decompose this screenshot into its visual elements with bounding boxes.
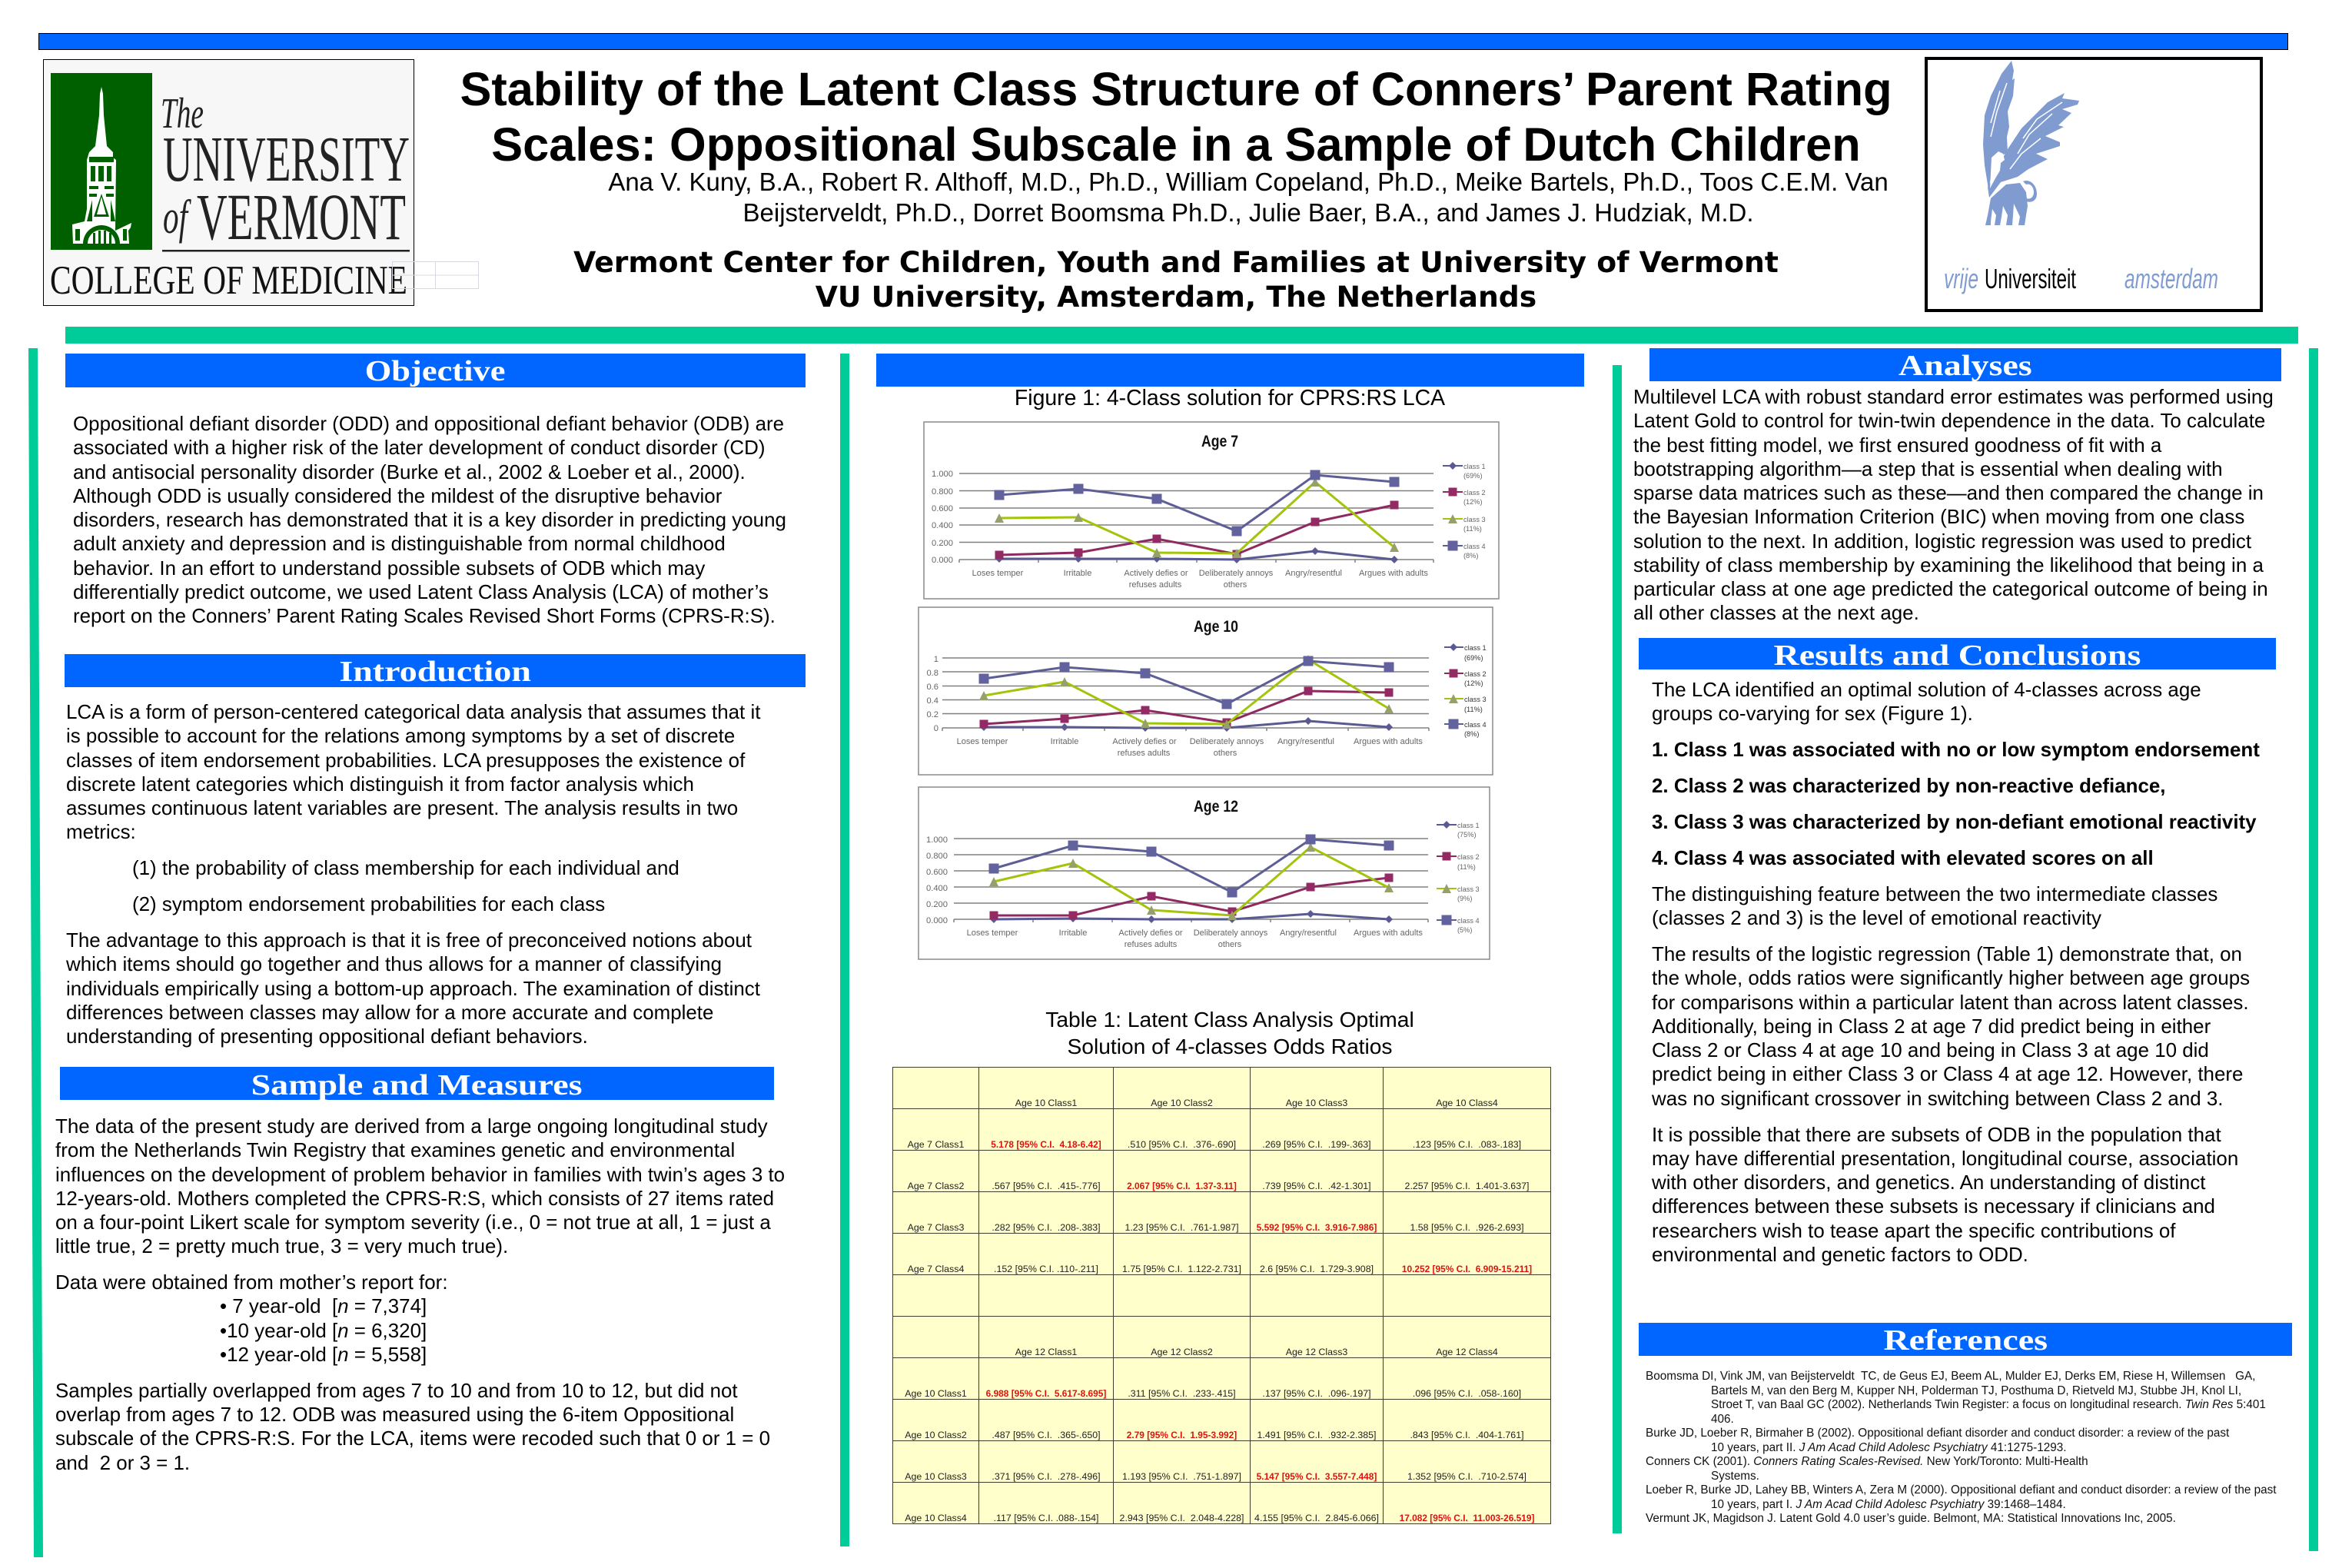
text: analyses: Latent Gold to control for twin-twin dependence in the data. To calculate xyxy=(1633,410,2265,432)
table: odds ratios: 5.147 [95% C.I. 3.557-7.448] xyxy=(1257,1471,1377,1482)
table: odds ratios: Age 7 Class4 xyxy=(908,1264,964,1274)
affiliations: Vermont Center for Children, Youth and Families at University of Vermont xyxy=(573,245,1779,279)
text: introduction: individuals empirically using a bottom-up approach. The examination of distinct xyxy=(66,978,760,1000)
text: sample and measures: •12 year-old [n = 5,558] xyxy=(220,1344,427,1366)
chart: Age 10: Age 10 xyxy=(1194,618,1238,636)
chart: Age 7: Angry/resentful xyxy=(1285,569,1342,578)
text: analyses: sparse data matrices such as these—and then compared the change in xyxy=(1633,483,2264,504)
table: odds ratios: 1.23 [95% C.I. .761-1.987] xyxy=(1125,1222,1239,1233)
table: odds ratios: 4.155 [95% C.I. 2.845-6.066] xyxy=(1254,1513,1379,1523)
chart: Age 12: class 1 xyxy=(1457,822,1480,829)
chart: Age 10: refuses adults xyxy=(1118,749,1171,758)
text: results and conclusions: 3. Class 3 was characterized by non-defiant emotional reactivity xyxy=(1652,812,2257,833)
chart: Age 7: Actively defies or xyxy=(1124,569,1188,578)
table: odds ratios: Age 10 Class3 xyxy=(1286,1098,1347,1108)
chart: Age 12: Irritable xyxy=(1059,929,1087,938)
table: odds ratios: .487 [95% C.I. .365-.650] xyxy=(992,1430,1101,1440)
chart: Age 12: class 4 xyxy=(1457,917,1480,925)
table: odds ratios: 1.75 [95% C.I. 1.122-2.731] xyxy=(1122,1264,1241,1274)
chart: Age 7: class 4 xyxy=(1463,543,1486,550)
chart: Age 12: Argues with adults xyxy=(1354,929,1423,938)
text: analyses: solution to the next. In addition, logistic regression was used to predict xyxy=(1633,530,2251,552)
table: odds ratios: Age 10 Class4 xyxy=(905,1513,967,1523)
chart: Age 10: Deliberately annoys xyxy=(1190,737,1264,746)
title xyxy=(460,63,1892,171)
text: introduction: is possible to account for the relations among symptoms by a set of discrete xyxy=(66,726,735,747)
chart: Age 12: Actively defies or xyxy=(1118,929,1183,938)
text: sample and measures: overlap from ages 7 to 12. ODB was measured using the 6-item Oppositional xyxy=(55,1404,734,1426)
text: objective: Oppositional defiant disorder (ODD) and oppositional defiant behavior (ODB) are xyxy=(73,414,784,435)
text: introduction: metrics: xyxy=(66,822,136,843)
text: introduction: (2) symptom endorsement probabilities for each class xyxy=(132,894,605,915)
heading: Objective: Objective xyxy=(365,355,506,387)
heading: Analyses xyxy=(1649,348,2281,381)
chart: Age 10: 0.8 xyxy=(926,669,938,678)
table: odds ratios: Age 7 Class3 xyxy=(908,1222,964,1233)
text: results and conclusions: may have differential presentation, longitudinal course, association xyxy=(1652,1148,2238,1170)
table: odds ratios: 1.352 [95% C.I. .710-2.574] xyxy=(1407,1471,1526,1482)
blank heading bar: middle column xyxy=(876,354,1584,387)
table: odds ratios: .117 [95% C.I. .088-.154] xyxy=(994,1513,1098,1523)
text: results and conclusions: with other disorders, and genetics. An understanding of distinct xyxy=(1652,1172,2205,1194)
authors: Beijsterveldt, Ph.D., Dorret Boomsma Ph.D., Julie Baer, B.A., and James J. Hudziak, M.D. xyxy=(742,198,1754,227)
text: results and conclusions: differences between these subsets is necessary if clinicians and xyxy=(1652,1196,2215,1218)
text: sample and measures: Samples partially overlapped from ages 7 to 10 and from 10 to 12, but did not xyxy=(55,1380,738,1402)
text: sample and measures xyxy=(55,1116,785,1474)
chart: Age 7: 0.400 xyxy=(932,521,953,530)
chart: Age 12: (75%) xyxy=(1457,831,1477,839)
chart: Age 10: Loses temper xyxy=(957,737,1008,746)
chart: Age 10: Angry/resentful xyxy=(1277,737,1334,746)
table: odds ratios: .152 [95% C.I. .110-.211] xyxy=(994,1264,1098,1274)
table title xyxy=(1045,1007,1414,1058)
chart: Age 10: 0.4 xyxy=(926,696,938,706)
chart: Age 7: class 2 xyxy=(1463,489,1486,497)
chart: Age 10: (12%) xyxy=(1464,679,1483,687)
text: sample and measures: subscale of the CPRS-R:S. For the LCA, items were recoded such that 0 or 1 = 0 xyxy=(55,1428,770,1450)
chart: Age 10: Argues with adults xyxy=(1354,737,1423,746)
text: introduction: LCA is a form of person-centered categorical data analysis that assumes that it xyxy=(66,702,760,723)
logo: Vrije Universiteit Amsterdam: vrije xyxy=(1944,263,1978,294)
table: odds ratios: 2.6 [95% C.I. 1.729-3.908] xyxy=(1260,1264,1374,1274)
chart: Age 12: 0.400 xyxy=(926,884,948,893)
chart: Age 7: (69%) xyxy=(1463,472,1483,480)
text: introduction: classes of item endorsement probabilities. LCA presupposes the existence of xyxy=(66,750,745,772)
table: odds ratios: Age 12 Class4 xyxy=(1436,1347,1498,1357)
text: objective: Although ODD is usually considered the mildest of the disruptive behavior xyxy=(73,486,722,507)
text: sample and measures: Data were obtained from mother’s report for: xyxy=(55,1272,448,1294)
table: odds ratios: .123 [95% C.I. .083-.183] xyxy=(1413,1139,1521,1150)
text: references: Burke JD, Loeber R, Birmaher B (2002). Oppositional defiant disorder and conduct disorder: a review of the past xyxy=(1646,1427,2229,1440)
table: odds ratios: 2.79 [95% C.I. 1.95-3.992] xyxy=(1127,1430,1237,1440)
text: analyses: bootstrapping algorithm—a step that is essential when dealing with xyxy=(1633,459,2223,480)
table: odds ratios: 6.988 [95% C.I. 5.617-8.695] xyxy=(986,1388,1106,1399)
text: results and conclusions: was no significant crossover in switching between Class 2 and 3. xyxy=(1652,1088,2223,1110)
chart: Age 12: class 2 xyxy=(1457,853,1480,861)
table: odds ratios: 17.082 [95% C.I. 11.003-26.519] xyxy=(1400,1513,1534,1523)
text: references xyxy=(1646,1370,2277,1525)
green divider bar xyxy=(65,327,2298,344)
text: introduction: assumes continuous latent variables are present. The analysis results in two xyxy=(66,798,738,819)
text: analyses: the Bayesian Information Criterion (BIC) when moving from one class xyxy=(1633,507,2244,528)
text: results and conclusions: 1. Class 1 was associated with no or low symptom endorsement xyxy=(1652,739,2260,761)
table: odds ratios: Age 12 Class2 xyxy=(1151,1347,1213,1357)
chart: Age 10: 0.2 xyxy=(926,710,938,719)
chart: Age 12: 0.200 xyxy=(926,900,948,909)
chart: Age 7: (12%) xyxy=(1463,498,1483,506)
text: results and conclusions: environmental and genetic factors to ODD. xyxy=(1652,1244,2028,1266)
chart: Age 12: Angry/resentful xyxy=(1280,929,1337,938)
chart: Age 7: Deliberately annoys xyxy=(1199,569,1274,578)
text: introduction: discrete latent categories which distinguish it from factor analysis which xyxy=(66,774,694,796)
chart: Age 10 xyxy=(919,607,1493,775)
logo: University of Vermont College of Medicine: The xyxy=(161,90,204,138)
chart: Age 10: class 2 xyxy=(1464,670,1487,678)
chart: Age 10: class 3 xyxy=(1464,696,1487,703)
text: sample and measures: influences on the development of problem behavior in families with twin’s ages 3 to xyxy=(55,1164,785,1185)
text: results and conclusions: The LCA identified an optimal solution of 4-classes across age xyxy=(1652,679,2201,701)
chart: Age 7: (11%) xyxy=(1463,525,1482,533)
text: references: Bartels M, van den Berg M, Kupper NH, Polderman TJ, Posthuma D, Rietveld MJ, Stubbe JH, Knol LI, xyxy=(1711,1384,2241,1397)
text: objective: behavior. In an effort to understand possible subsets of ODB which may xyxy=(73,558,705,580)
chart: Age 7: 0.000 xyxy=(932,556,953,565)
text: introduction: differences between classes may allow for a more accurate and complete xyxy=(66,1002,713,1024)
chart: Age 12: class 3 xyxy=(1457,885,1480,893)
chart: Age 12: refuses adults xyxy=(1125,940,1178,949)
heading: Results and Conclusions xyxy=(1639,638,2276,669)
text: references: 10 years, part II. J Am Acad Child Adolesc Psychiatry 41:1275-1293. xyxy=(1711,1441,2067,1454)
text: results and conclusions: The results of the logistic regression (Table 1) demonstrate that, on xyxy=(1652,944,2242,965)
chart: Age 7: class 1 xyxy=(1463,463,1486,470)
text: analyses: Multilevel LCA with robust standard error estimates was performed using xyxy=(1633,387,2274,408)
text: references: Conners CK (2001). Conners Rating Scales-Revised. New York/Toronto: Multi-Health xyxy=(1646,1455,2088,1468)
table: odds ratios: 10.252 [95% C.I. 6.909-15.211] xyxy=(1402,1264,1532,1274)
text: introduction: The advantage to this approach is that it is free of preconceived notions about xyxy=(66,930,752,952)
chart: Age 7: Irritable xyxy=(1064,569,1091,578)
text: sample and measures: •10 year-old [n = 6,320] xyxy=(220,1321,427,1342)
table title: Solution of 4-classes Odds Ratios xyxy=(1067,1034,1393,1058)
text: references: Systems. xyxy=(1711,1470,1759,1483)
heading: Introduction xyxy=(65,654,806,687)
logo: Vrije Universiteit Amsterdam: Universiteit xyxy=(1985,263,2076,294)
logo: University of Vermont College of Medicine xyxy=(43,59,479,306)
text: objective: differentially predict outcome, we used Latent Class Analysis (LCA) of mother’s xyxy=(73,582,769,603)
table: odds ratios: .096 [95% C.I. .058-.160] xyxy=(1413,1388,1521,1399)
affiliations xyxy=(573,245,1779,314)
text: results and conclusions xyxy=(1652,679,2260,1266)
table: odds ratios: Age 10 Class3 xyxy=(905,1471,967,1482)
authors: Ana V. Kuny, B.A., Robert R. Althoff, M.D., Ph.D., William Copeland, Ph.D., Meike Bartels, Ph.D., Toos C.E.M. Van xyxy=(608,168,1889,196)
chart: Age 10: (8%) xyxy=(1464,730,1479,738)
table: odds ratios: 5.178 [95% C.I. 4.18-6.42] xyxy=(991,1139,1101,1150)
chart: Age 7: Argues with adults xyxy=(1359,569,1428,578)
heading: Introduction: Introduction xyxy=(339,656,531,687)
affiliations: VU University, Amsterdam, The Netherlands xyxy=(816,280,1536,314)
text: sample and measures: The data of the present study are derived from a large ongoing longitudinal study xyxy=(55,1116,768,1138)
logo: Vrije Universiteit Amsterdam xyxy=(1925,57,2263,312)
chart: Age 7: others xyxy=(1224,580,1247,590)
text: references: Stroet T, van Baal GC (2002). Netherlands Twin Register: a focus on longitudinal research. Twin Res 5:401 xyxy=(1711,1398,2266,1411)
chart: Age 7: 1.000 xyxy=(932,470,953,479)
text: results and conclusions: for comparisons within a particular latent than across latent classes. xyxy=(1652,992,2249,1014)
table: odds ratios: 1.58 [95% C.I. .926-2.693] xyxy=(1410,1222,1524,1233)
table: odds ratios: Age 10 Class1 xyxy=(905,1388,967,1399)
text: results and conclusions: the whole, odds ratios were significantly higher between age groups xyxy=(1652,968,2250,989)
heading: References: References xyxy=(1883,1324,2048,1356)
chart: Age 10: Actively defies or xyxy=(1112,737,1177,746)
chart: Age 7: Loses temper xyxy=(972,569,1024,578)
text: results and conclusions: (classes 2 and 3) is the level of emotional reactivity xyxy=(1652,908,2101,929)
text: objective xyxy=(73,414,786,627)
table: odds ratios: .282 [95% C.I. .208-.383] xyxy=(992,1222,1101,1233)
chart: Age 7: 0.200 xyxy=(932,539,953,548)
text: analyses xyxy=(1633,387,2274,624)
text: results and conclusions: It is possible that there are subsets of ODB in the population that xyxy=(1652,1125,2221,1146)
text: results and conclusions: Additionally, being in Class 2 at age 7 did predict being in either xyxy=(1652,1016,2211,1038)
table: odds ratios: .843 [95% C.I. .404-1.761] xyxy=(1410,1430,1524,1440)
chart: Age 12: Deliberately annoys xyxy=(1194,929,1268,938)
chart: Age 12: 0.000 xyxy=(926,916,948,925)
table: odds ratios: .137 [95% C.I. .096-.197] xyxy=(1262,1388,1371,1399)
table: odds ratios: Age 10 Class1 xyxy=(1015,1098,1077,1108)
title: Stability of the Latent Class Structure of Conners’ Parent Rating xyxy=(460,63,1892,115)
chart: Age 12 xyxy=(919,787,1490,959)
chart: Age 12: others xyxy=(1218,940,1242,949)
text: sample and measures: 12-years-old. Mothers completed the CPRS-R:S, which consists of 27 items rated xyxy=(55,1188,774,1210)
table: odds ratios: 5.592 [95% C.I. 3.916-7.986] xyxy=(1257,1222,1377,1233)
chart: Age 7: 0.800 xyxy=(932,487,953,497)
chart: Age 12: Loses temper xyxy=(967,929,1018,938)
chart: Age 7 xyxy=(924,422,1499,599)
far right strip xyxy=(2309,348,2318,1551)
table: odds ratios xyxy=(892,1067,1551,1524)
table: odds ratios: 2.257 [95% C.I. 1.401-3.637] xyxy=(1405,1181,1529,1191)
chart: Age 7: refuses adults xyxy=(1129,580,1182,590)
chart: Age 10: others xyxy=(1214,749,1237,758)
table: odds ratios: .567 [95% C.I. .415-.776] xyxy=(992,1181,1101,1191)
chart: Age 12: 0.800 xyxy=(926,852,948,861)
table: odds ratios: Age 10 Class2 xyxy=(1151,1098,1213,1108)
chart: Age 7: (8%) xyxy=(1463,552,1478,560)
text: sample and measures: from the Netherlands Twin Registry that examines genetic and environmental xyxy=(55,1140,735,1161)
table: odds ratios: Age 10 Class4 xyxy=(1436,1098,1498,1108)
text: results and conclusions: groups co-varying for sex (Figure 1). xyxy=(1652,703,1973,725)
table: odds ratios: 2.067 [95% C.I. 1.37-3.11] xyxy=(1127,1181,1237,1191)
heading: Objective xyxy=(65,354,806,387)
chart: Age 12: (11%) xyxy=(1457,863,1476,871)
text: sample and measures: • 7 year-old [n = 7,374] xyxy=(220,1296,427,1317)
logo: University of Vermont College of Medicine: of xyxy=(163,191,191,244)
text: references: Boomsma DI, Vink JM, van Beijsterveldt TC, de Geus EJ, Beem AL, Mulder EJ, Derks EM, Riese H, Willemsen GA, xyxy=(1646,1370,2255,1383)
text: objective: and antisocial personality disorder (Burke et al., 2002 & Loeber et al., 2000). xyxy=(73,461,746,483)
figure title: Figure 1: 4-Class solution for CPRS:RS LCA xyxy=(1015,386,1445,410)
text: results and conclusions: The distinguishing feature between the two intermediate classes xyxy=(1652,884,2217,905)
right column strip xyxy=(1613,365,1622,1533)
table: odds ratios: .371 [95% C.I. .278-.496] xyxy=(992,1471,1101,1482)
authors xyxy=(608,168,1889,227)
chart: Age 12: (5%) xyxy=(1457,926,1472,934)
table: odds ratios: Age 7 Class2 xyxy=(908,1181,964,1191)
chart: Age 12: 0.600 xyxy=(926,868,948,877)
text: objective: adult anxiety and depression and is distinguishable from normal childhood xyxy=(73,533,726,555)
chart: Age 7: 0.600 xyxy=(932,504,953,513)
table: odds ratios: .311 [95% C.I. .233-.415] xyxy=(1128,1388,1236,1399)
table: odds ratios: .510 [95% C.I. .376-.690] xyxy=(1128,1139,1236,1150)
text: results and conclusions: 4. Class 4 was associated with elevated scores on all xyxy=(1652,848,2154,869)
text: analyses: the best fitting model, we first ensured goodness of fit with a xyxy=(1633,435,2161,457)
text: analyses: stability of class membership by examining the likelihood that being in a xyxy=(1633,555,2264,576)
heading: Analyses: Analyses xyxy=(1899,350,2032,381)
heading: Sample and Measures xyxy=(60,1067,774,1100)
text: results and conclusions: Class 2 or Class 4 at age 10 and being in Class 3 at age 10 did xyxy=(1652,1040,2209,1061)
text: results and conclusions: predict being in either Class 3 or Class 4 at age 12. However, there xyxy=(1652,1064,2243,1085)
table: odds ratios: .269 [95% C.I. .199-.363] xyxy=(1262,1139,1371,1150)
chart: Age 10: Irritable xyxy=(1051,737,1078,746)
chart: Age 7: class 3 xyxy=(1463,516,1486,523)
chart: Age 10: 0 xyxy=(934,724,938,733)
text: references: 10 years, part I. J Am Acad Child Adolesc Psychiatry 39:1468–1484. xyxy=(1711,1498,2066,1511)
text: sample and measures: and 2 or 3 = 1. xyxy=(55,1453,190,1474)
chart: Age 12: (9%) xyxy=(1457,895,1472,902)
chart: Age 10: class 4 xyxy=(1464,721,1487,729)
table: odds ratios: Age 12 Class3 xyxy=(1286,1347,1347,1357)
text: references: 406. xyxy=(1711,1413,1734,1426)
text: sample and measures: little true, 2 = pretty much true, 3 = very much true). xyxy=(55,1236,508,1257)
text: objective: report on the Conners’ Parent Rating Scales Revised Short Forms (CPRS-R:S). xyxy=(73,606,776,627)
table: odds ratios: 1.491 [95% C.I. .932-2.385] xyxy=(1257,1430,1376,1440)
chart: Age 10: 1 xyxy=(934,655,938,664)
logo: Vrije Universiteit Amsterdam: amsterdam xyxy=(2124,263,2218,294)
chart: Age 10: (11%) xyxy=(1464,706,1483,713)
text: results and conclusions: researchers wish to tease apart the specific contributions of xyxy=(1652,1221,2176,1242)
text: sample and measures: on a four-point Likert scale for symptom severity (i.e., 0 = not true at all, 1 = just a xyxy=(55,1212,771,1234)
text: introduction: which items should go together and thus allows for a manner of classifying xyxy=(66,954,722,975)
line charts: figure 1 xyxy=(918,421,1500,960)
text: analyses: particular class at one age predicted the categorical outcome of being in xyxy=(1633,579,2268,600)
table: odds ratios: .739 [95% C.I. .42-1.301] xyxy=(1262,1181,1371,1191)
table: odds ratios: Age 7 Class1 xyxy=(908,1139,964,1150)
text: introduction: (1) the probability of class membership for each individual and xyxy=(132,858,679,879)
text: analyses: all other classes at the next age. xyxy=(1633,603,1919,624)
text: references: Loeber R, Burke JD, Lahey BB, Winters A, Zera M (2000). Oppositional defiant and conduct disorder: a review of the past xyxy=(1646,1483,2277,1497)
table title: Table 1: Latent Class Analysis Optimal xyxy=(1045,1007,1414,1031)
text: objective: disorders, research has demonstrated that it is a key disorder in predicting young xyxy=(73,510,786,531)
chart: Age 12: 1.000 xyxy=(926,835,948,845)
chart: Age 10: (69%) xyxy=(1464,654,1483,662)
top blue bar xyxy=(38,33,2288,50)
text: results and conclusions: 2. Class 2 was characterized by non-reactive defiance, xyxy=(1652,776,2166,797)
text: introduction: understanding of presenting oppositional defiant behaviors. xyxy=(66,1026,588,1048)
chart: Age 12: Age 12 xyxy=(1194,798,1238,816)
title: Scales: Oppositional Subscale in a Sample of Dutch Children xyxy=(491,118,1861,171)
text: introduction xyxy=(66,702,761,1048)
left column strip xyxy=(28,348,43,1557)
table: odds ratios: Age 10 Class2 xyxy=(905,1430,967,1440)
text: references: Vermunt JK, Magidson J. Latent Gold 4.0 user’s guide. Belmont, MA: Statistical Innovations Inc, 2005. xyxy=(1646,1512,2176,1525)
table: odds ratios: Age 12 Class1 xyxy=(1015,1347,1077,1357)
chart: Age 7: Age 7 xyxy=(1201,433,1238,450)
text: objective: associated with a higher risk of the later development of conduct disorder (CD) xyxy=(73,437,766,459)
chart: Age 10: class 1 xyxy=(1464,644,1487,652)
table: odds ratios: 1.193 [95% C.I. .751-1.897] xyxy=(1122,1471,1241,1482)
chart: Age 10: 0.6 xyxy=(926,683,938,692)
heading: References xyxy=(1639,1323,2292,1356)
middle column strip xyxy=(840,354,849,1546)
table: odds ratios: 2.943 [95% C.I. 2.048-4.228] xyxy=(1120,1513,1244,1523)
